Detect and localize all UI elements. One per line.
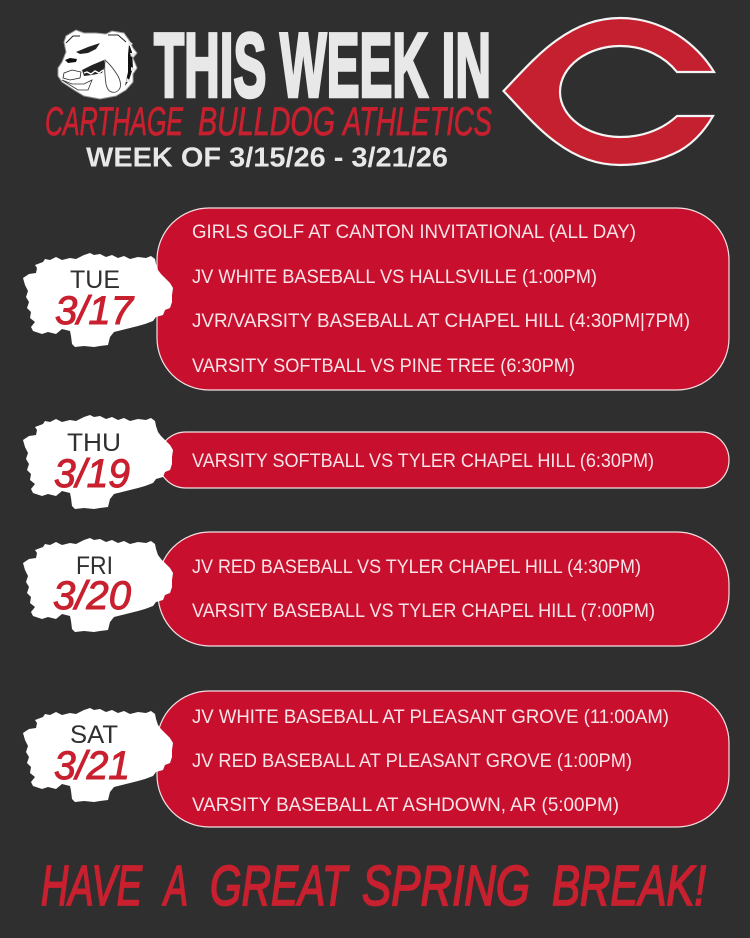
event: jv white baseball: JV WHITE BASEBALL VS HALLSVILLE (1:00PM) [192, 266, 597, 288]
footer message: GREAT [210, 854, 350, 918]
event: varsity baseball: VARSITY BASEBALL VS TYLER CHAPEL HILL (7:00PM) [192, 600, 655, 622]
icon: bulldog mascot [58, 30, 137, 99]
event: jv red baseball: JV RED BASEBALL AT PLEASANT GROVE (1:00PM) [192, 750, 632, 772]
subtitle: carthage bulldog athletics: BULLDOG [198, 100, 335, 144]
footer message: HAVE [41, 854, 143, 918]
footer message: A [162, 854, 188, 918]
panel: friday events [158, 532, 729, 646]
subtitle: carthage bulldog athletics [45, 100, 492, 144]
event: varsity baseball: VARSITY BASEBALL AT ASHDOWN, AR (5:00PM) [192, 794, 619, 816]
panel: tuesday events [157, 208, 729, 390]
logo: red C [504, 18, 714, 165]
event: varsity softball: VARSITY SOFTBALL VS PINE TREE (6:30PM) [192, 355, 575, 377]
event: jv white baseball: JV WHITE BASEBALL AT PLEASANT GROVE (11:00AM) [192, 706, 669, 728]
event: girls golf: GIRLS GOLF AT CANTON INVITATIONAL (ALL DAY) [192, 221, 636, 243]
badge: thursday [23, 415, 173, 509]
date range: WEEK OF 3/15/26 - 3/21/26 [86, 142, 448, 172]
badge: saturday: 3/21 [54, 744, 130, 788]
event: jvr varsity baseball: JVR/VARSITY BASEBALL AT CHAPEL HILL (4:30PM|7PM) [192, 310, 690, 332]
subtitle: carthage bulldog athletics: ATHLETICS [342, 100, 492, 144]
badge: tuesday: TUE [70, 266, 120, 294]
badge: friday [23, 538, 173, 632]
event: varsity softball: VARSITY SOFTBALL VS TYLER CHAPEL HILL (6:30PM) [192, 450, 654, 472]
badge: thursday: THU [67, 429, 121, 457]
badge: thursday: 3/19 [54, 452, 130, 496]
subtitle: carthage bulldog athletics: CARTHAGE [45, 100, 184, 144]
badge: friday: 3/20 [53, 574, 131, 618]
footer message [41, 854, 706, 918]
panel: saturday events [157, 691, 729, 827]
badge: tuesday: 3/17 [55, 289, 135, 333]
badge: saturday [23, 708, 173, 802]
event: jv red baseball: JV RED BASEBALL VS TYLER CHAPEL HILL (4:30PM) [192, 556, 641, 578]
panel: thursday events [158, 432, 729, 488]
badge: saturday: SAT [70, 721, 118, 749]
footer message: SPRING [362, 854, 530, 918]
badge: friday: FRI [76, 552, 113, 580]
badge: tuesday [23, 253, 173, 347]
